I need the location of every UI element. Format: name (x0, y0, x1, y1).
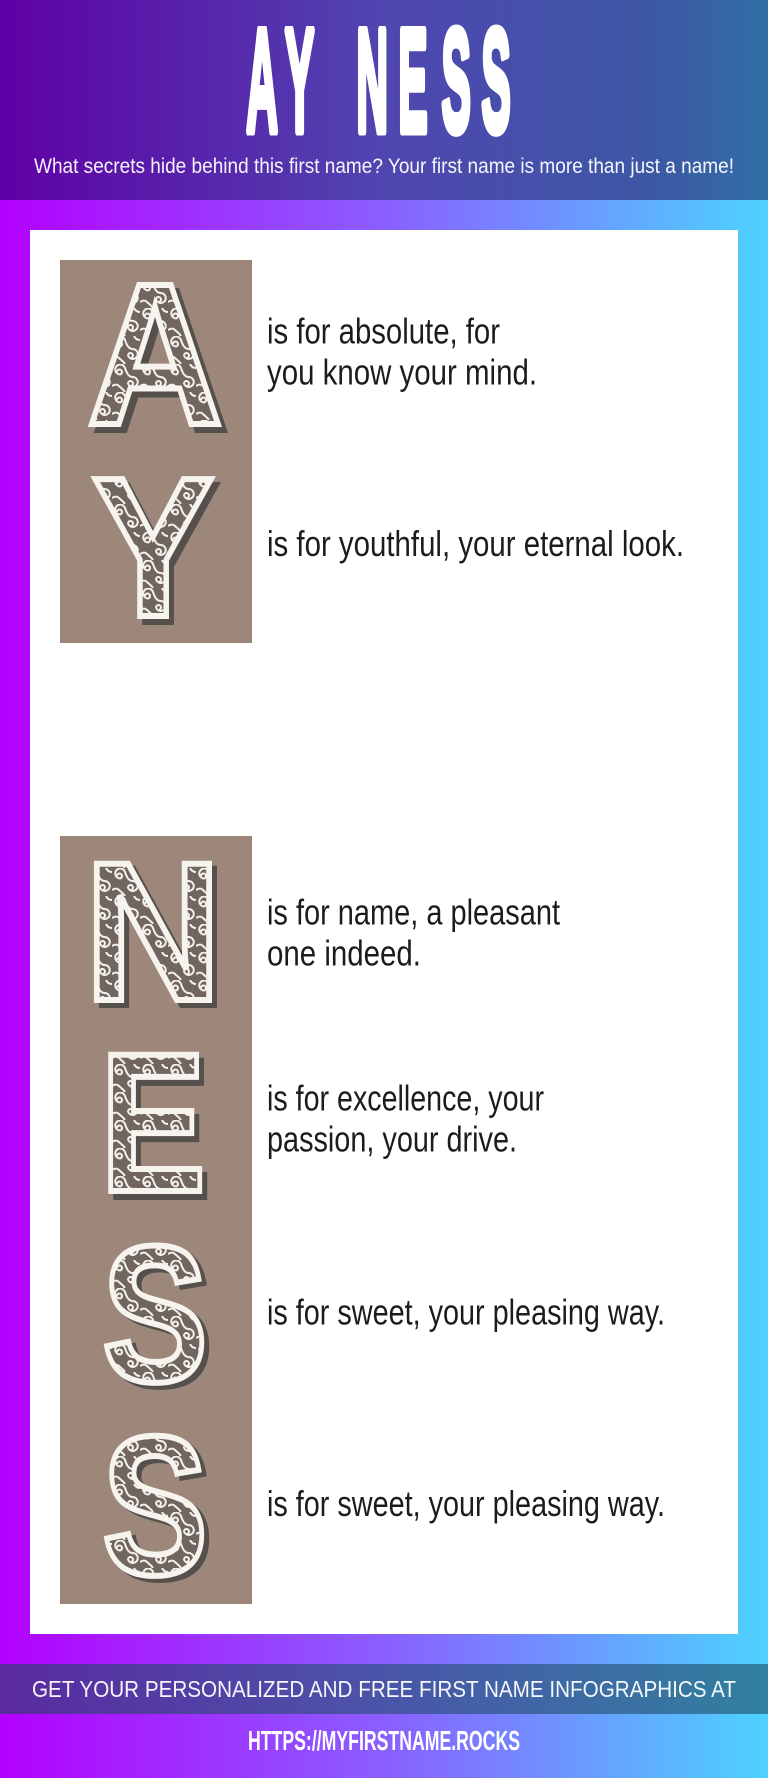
text: A: you know your mind. (267, 352, 537, 392)
text: Y: is for youthful, your eternal look. (267, 523, 684, 564)
letter Y: Y (92, 437, 214, 659)
text: N: one indeed. (267, 932, 421, 974)
letter E: E (105, 1018, 211, 1239)
letter N: N (84, 821, 222, 1042)
text: E: passion, your drive. (267, 1118, 517, 1160)
footer url: HTTPS://MYFIRSTNAME.ROCKS (248, 1725, 520, 1756)
letter Y: Y (97, 443, 219, 665)
letter S: S (107, 1399, 213, 1620)
text: A: is for absolute, for (267, 310, 500, 352)
text: S: is for sweet, your pleasing way. (267, 1292, 665, 1332)
letter N: N (89, 826, 227, 1047)
text: E: is for excellence, your (267, 1078, 544, 1118)
letter panel: A and Y (60, 241, 252, 665)
white content panel (30, 230, 738, 1634)
letter S: S (102, 1206, 208, 1423)
letter A: A (93, 247, 229, 473)
letter S: S (102, 1395, 208, 1616)
title: AY NESS (246, 0, 511, 162)
text: N: is for name, a pleasant (267, 892, 560, 932)
text: N (267, 892, 560, 974)
text: E (267, 1078, 544, 1160)
text: S: is for sweet, your pleasing way. (267, 1483, 665, 1524)
text: A (267, 310, 537, 392)
header band (0, 0, 768, 200)
letter A: A (87, 241, 223, 467)
letter E: E (100, 1012, 206, 1233)
letter S: S (107, 1210, 213, 1427)
footer band (0, 1664, 768, 1714)
letter panel: N E S S (60, 821, 252, 1620)
